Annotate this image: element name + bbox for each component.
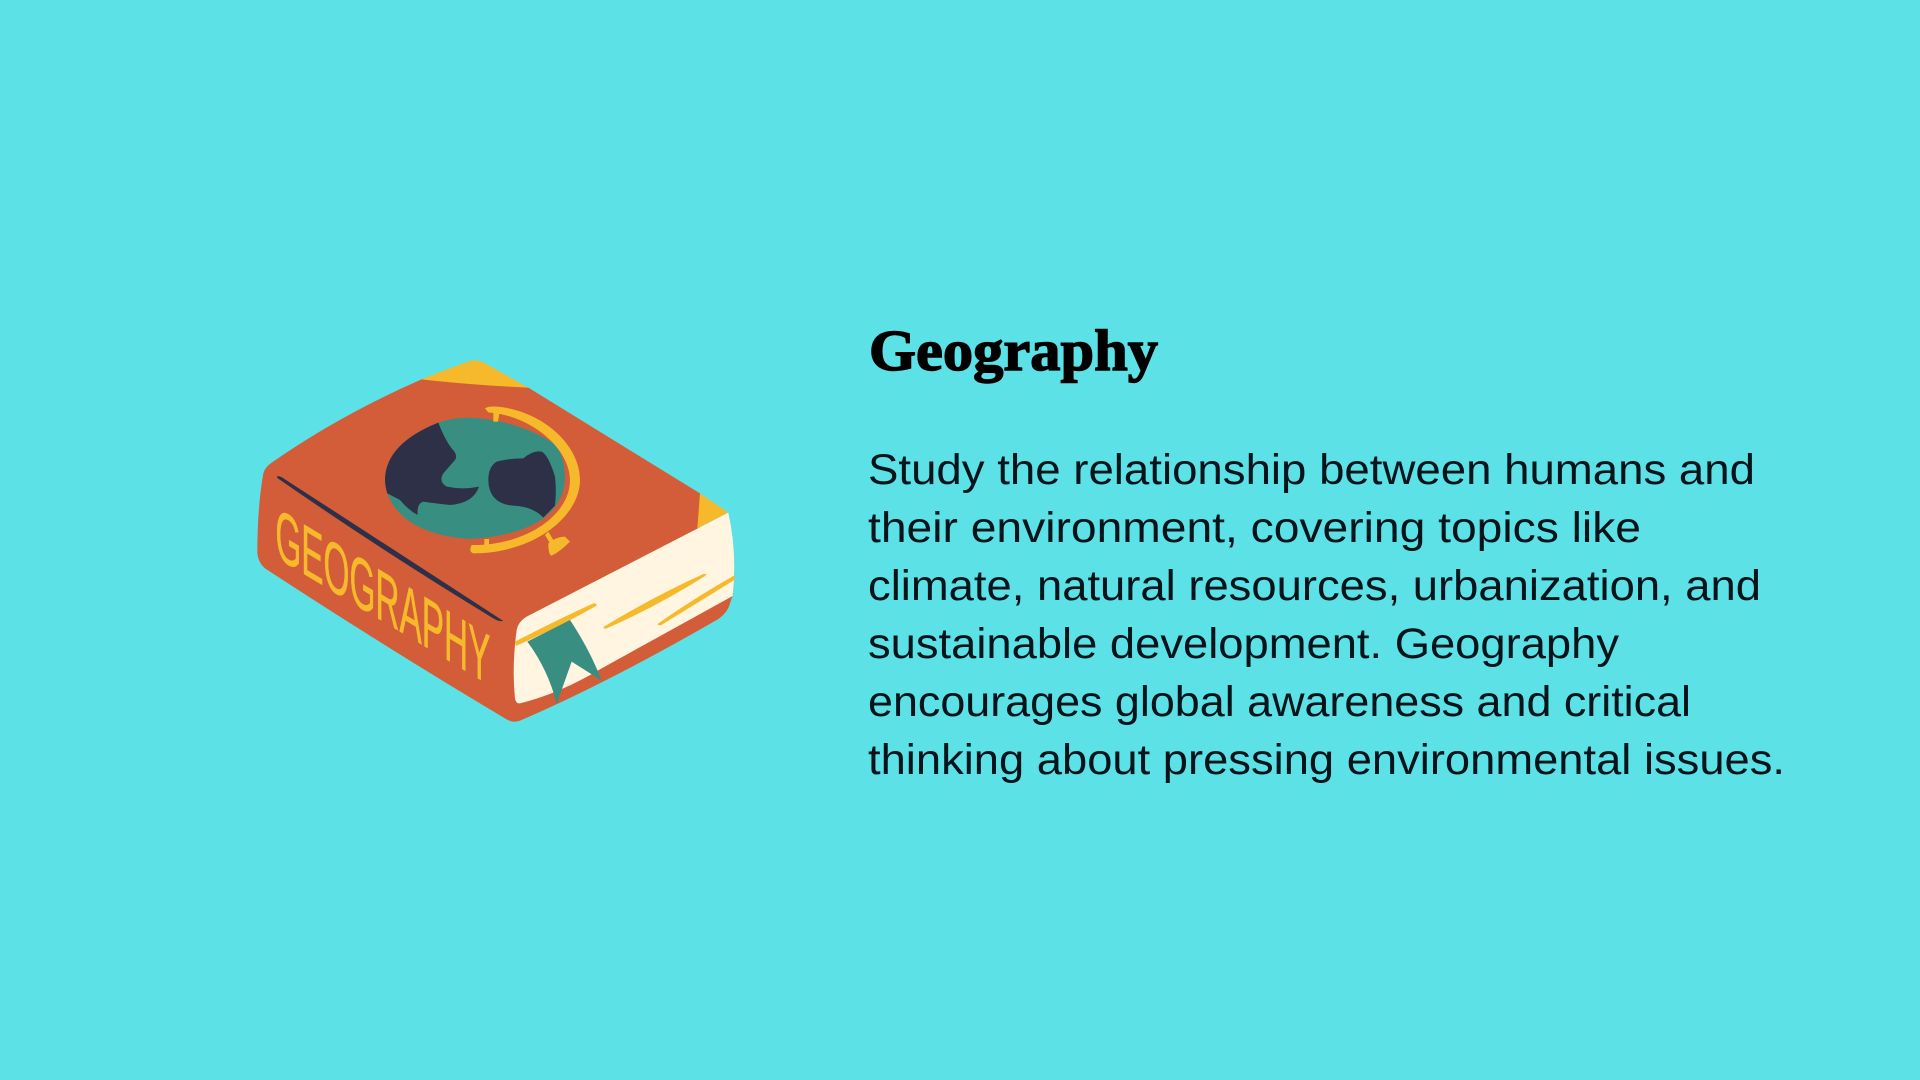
globe stand (470, 407, 580, 556)
bookmark ribbon (527, 620, 602, 704)
pages (514, 513, 734, 703)
page line right (658, 575, 735, 625)
book cover (257, 379, 733, 722)
globe ocean (385, 418, 565, 539)
body paragraph: Study the relationship between humans and (868, 446, 1755, 494)
right corner guard (697, 493, 728, 528)
icon: geography book: GEOGRAPHY (275, 493, 490, 701)
globe (385, 407, 580, 556)
body paragraph: thinking about pressing environmental issues. (868, 736, 1785, 784)
top corner guard (422, 360, 528, 388)
body paragraph (868, 446, 1785, 784)
page line middle (604, 574, 706, 629)
spine line (277, 476, 503, 621)
body paragraph: their environment, covering topics like (868, 504, 1641, 552)
body paragraph: encourages global awareness and critical (868, 678, 1691, 726)
icon: geography book (257, 360, 735, 722)
land left (385, 423, 479, 515)
body paragraph: climate, natural resources, urbanization, and (868, 562, 1761, 610)
heading: Geography (869, 318, 1158, 383)
land right (488, 451, 556, 518)
body paragraph: sustainable development. Geography (868, 620, 1620, 668)
page line left (515, 603, 597, 646)
